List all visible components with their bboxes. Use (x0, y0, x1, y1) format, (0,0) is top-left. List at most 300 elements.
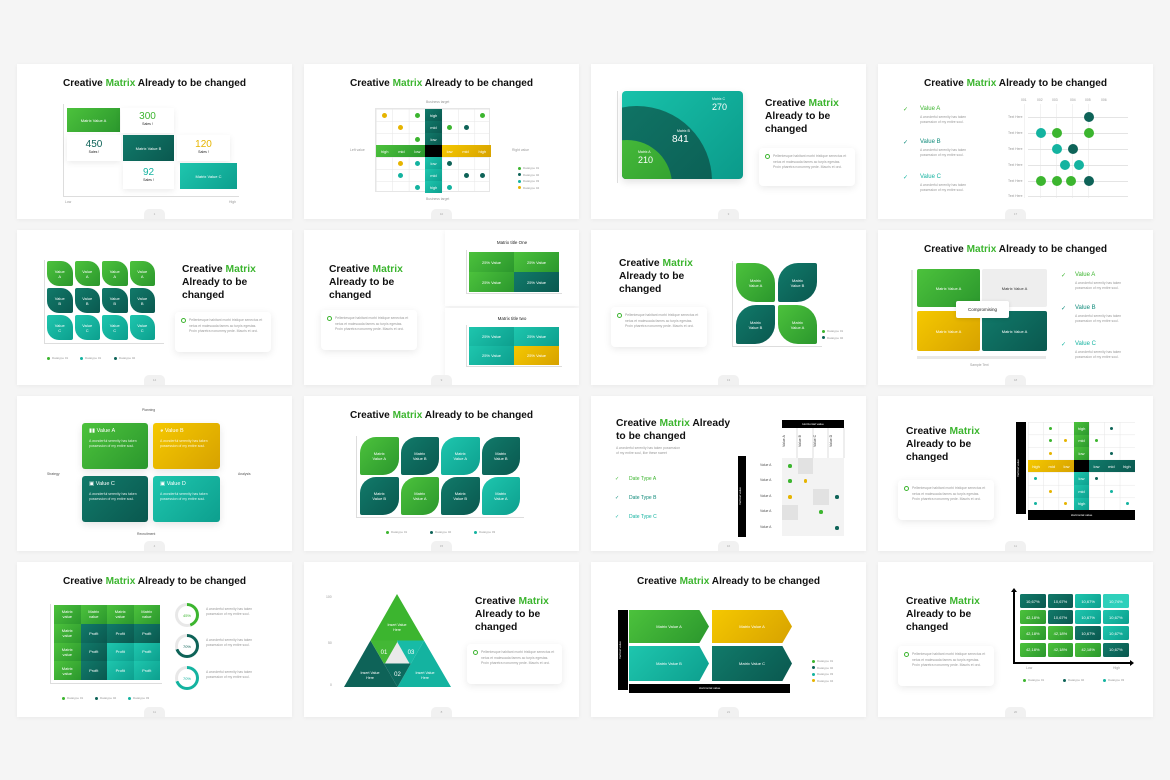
box: Matrix Value B: Matrix Value B (136, 146, 161, 150)
title: changed (906, 622, 948, 633)
legend (812, 659, 834, 682)
arrows: Matrix Value A (656, 624, 682, 629)
title (906, 426, 980, 463)
leaf grid (360, 437, 520, 515)
legend: Datatype 03 (1108, 678, 1124, 682)
checklist: ✓ (615, 495, 619, 501)
legend: Datatype 01 (52, 356, 68, 360)
card: 300 (121, 108, 174, 133)
slide 13: profit matrix + donuts (17, 562, 292, 717)
legend (62, 696, 149, 700)
quadrant: Matrix Value A (1002, 286, 1027, 290)
legend: Datatype 02 (119, 356, 135, 360)
page number: 9 (441, 378, 442, 382)
leaf grid: Value (137, 268, 147, 274)
leaf grid: Value (137, 296, 147, 300)
checklist: Date Type B (629, 495, 656, 501)
table: Value A (760, 478, 771, 482)
title: changed (619, 284, 661, 295)
arc panel: 841 (672, 134, 689, 145)
cross grid: low (1079, 476, 1085, 481)
leaf grid: B (113, 300, 116, 306)
card: Value C (82, 476, 148, 522)
title: Creative Matrix Already to be changed (637, 576, 820, 587)
slide 11: table matrix: of my entire soul, like these sweet (616, 451, 667, 455)
legend: Datatype 02 (523, 172, 539, 176)
card: Value A: ▮▮ Value A (89, 428, 115, 434)
leaf grid: C (141, 328, 144, 332)
slide 8: compromising quadrant (878, 230, 1153, 385)
dot chart: 006 (1101, 98, 1107, 102)
axes (63, 104, 239, 197)
page number (718, 375, 739, 385)
page number: 3 (728, 212, 729, 216)
arc panel (622, 91, 743, 179)
cross grid (1016, 422, 1135, 520)
panel: matrix one: 25% Value (482, 260, 501, 264)
quadrant (917, 269, 1047, 351)
percent grid: 10,67% (1081, 631, 1095, 636)
slide 11: table matrix: A wonderful serenity has taken possession (616, 446, 680, 450)
leaf grid: Matrix (495, 491, 506, 496)
leaf grid (47, 261, 155, 340)
slide 9: four value cards: Strategy (47, 472, 60, 476)
leaf grid: A (141, 274, 144, 278)
arc panel: Matrix B (677, 129, 690, 133)
card: 450: Sales ! (89, 150, 99, 154)
leaf grid: C (58, 328, 61, 332)
card: Value D: A wonderful serenity has taken possession of my entire soul. (160, 492, 208, 501)
horizontal bar (629, 684, 790, 693)
title: Already to be (619, 271, 684, 282)
arc panel: Matrix C (712, 97, 725, 101)
percent grid: 10,67% (1109, 647, 1123, 652)
page number (144, 375, 165, 385)
cross grid: low (447, 148, 453, 154)
checklist: ✓ (1061, 273, 1066, 279)
table: Value B (798, 435, 802, 447)
percent grid (1020, 594, 1129, 657)
triangle chart (344, 594, 451, 687)
page number: 11 (153, 710, 156, 714)
page number: 8 (441, 710, 442, 714)
matrix: Profit (116, 649, 125, 654)
cross grid: mid (1108, 464, 1115, 469)
legend: Datatype 01 (85, 356, 101, 360)
horizontal bar: Horizontal value (699, 686, 720, 690)
leaf grid: Value B (413, 456, 427, 461)
checklist: possession of my entire soul. (1075, 319, 1119, 323)
page number: 20 (1014, 710, 1017, 714)
panel: matrix one: 25% Value (527, 280, 546, 284)
leaf grid: Value (110, 268, 120, 274)
dot chart: 002 (1037, 98, 1043, 102)
slide 12: cross matrix with bars (878, 396, 1153, 551)
triangle chart: Insert Value (416, 671, 434, 675)
title (329, 264, 403, 301)
triangle chart: 01 (381, 650, 388, 656)
legend: Datatype 01 (817, 659, 833, 663)
panel: matrix two: 25% Value (482, 353, 501, 358)
panel: matrix two: 25% Value (482, 334, 501, 339)
page number: 14 (153, 378, 156, 382)
slide 13: profit matrix + donuts: A wonderful serenity has taken (206, 638, 252, 642)
text card: Pellentesque habitant morbi tristique senectus et netus et malesuada fames ac turpis egestas. Proin pharetra nonummy pede. Mauris et orci. (625, 313, 698, 328)
matrix: Matrix (62, 666, 73, 671)
cross grid: high (1032, 464, 1040, 469)
arrows (629, 610, 709, 643)
table: Value A (760, 509, 771, 513)
slide 15: arrow matrix (591, 562, 866, 717)
slide 11: table matrix (591, 396, 866, 551)
cross grid: high (1078, 426, 1085, 431)
slide 15: arrow matrix: Matrix Value C (739, 661, 765, 666)
leaf grid: C (113, 328, 116, 332)
dot chart: Text Here (1008, 163, 1023, 167)
clover: Matrix (750, 320, 761, 324)
legend: Datatype 03 (133, 696, 149, 700)
cross grid: mid (398, 148, 405, 154)
clover: Value B (791, 282, 804, 288)
slide 13: profit matrix + donuts: A wonderful serenity has taken (206, 607, 252, 611)
legend: Datatype 02 (100, 696, 116, 700)
matrix: Profit (89, 668, 98, 673)
text card: Pellentesque habitant morbi tristique senectus et netus et malesuada fames ac turpis egestas. Proin pharetra nonummy pede. Mauris et orci. (773, 154, 846, 169)
title: changed (906, 452, 948, 463)
slide 2: cross matrix (304, 64, 579, 219)
slide 14: triangle: 0 (330, 683, 332, 687)
checklist: Date Type C (629, 514, 657, 520)
matrix: Matrix (141, 609, 152, 614)
slide 2: cross matrix: Left value (350, 148, 365, 152)
slide 9: four value cards: Analysis (238, 472, 251, 476)
matrix: Matrix (115, 609, 126, 614)
arc panel: Matrix A (638, 150, 651, 154)
page number (431, 541, 452, 551)
page number (718, 707, 739, 717)
legend: Datatype 04 (523, 186, 539, 190)
slide 13: profit matrix + donuts: possession of my entire soul. (206, 643, 250, 647)
leaf grid: Value (55, 322, 65, 328)
leaf grid: Value B (453, 496, 467, 501)
checklist: A wonderful serenity has taken (1075, 350, 1121, 354)
quadrant: Matrix Value A (1002, 328, 1027, 334)
legend: Datatype 02 (827, 336, 843, 340)
panel: matrix two (445, 308, 579, 385)
percent grid: 42,18% (1054, 631, 1067, 636)
donut: 70% teal (175, 666, 199, 690)
arc panel: 210 (638, 155, 653, 165)
axes with arrows (1013, 590, 1015, 664)
slide 8: compromising quadrant: Sample Text (970, 363, 989, 367)
checklist: Value A (920, 106, 940, 112)
cross grid: Horizontal value (1071, 513, 1092, 517)
checklist: ✓ (903, 107, 908, 113)
clover: Value A (791, 324, 804, 330)
checklist: possession of my entire soul. (1075, 286, 1119, 290)
matrix: value (62, 614, 72, 619)
leaf grid: A (113, 274, 116, 278)
checklist: A wonderful serenity has taken (1075, 314, 1121, 318)
title: Creative Matrix (765, 98, 839, 109)
percent grid: 42,18% (1081, 647, 1095, 652)
page number (144, 209, 165, 219)
slide 9: four value cards: Planning (142, 408, 155, 412)
table (738, 420, 844, 537)
leaf grid: Value (82, 296, 92, 300)
dot chart: 003 (1052, 98, 1058, 102)
clover: Matrix (792, 320, 803, 324)
leaf grid: B (86, 300, 89, 306)
clover: Matrix (750, 278, 761, 282)
leaf grid: Value A (413, 496, 426, 501)
matrix: value (89, 614, 99, 619)
triangle chart: Insert Value (361, 671, 379, 675)
text card: Pellentesque habitant morbi tristique senectus et netus et malesuada fames ac turpis egestas. Proin pharetra nonummy pede. Mauris et orci. (912, 486, 985, 501)
dot chart: Text Here (1008, 179, 1023, 183)
page number (1005, 707, 1026, 717)
text card: Pellentesque habitant morbi tristique senectus et netus et malesuada fames ac turpis egestas. Proin pharetra nonummy pede. Mauris et orci. (189, 318, 262, 333)
dot chart: Text Here (1008, 131, 1023, 135)
card: 450: 450 (86, 139, 102, 150)
checklist: ✓ (1061, 342, 1066, 348)
title: Creative Matrix Already (616, 418, 730, 429)
cross grid: low (1064, 464, 1070, 469)
slide 9: four value cards: Recruitment (137, 532, 155, 536)
dot chart: 005 (1085, 98, 1091, 102)
slide 6: two matrices (304, 230, 579, 385)
legend: Datatype 02 (817, 666, 833, 670)
text card (611, 307, 707, 347)
card: Value C: A wonderful serenity has taken possession of my entire soul. (89, 492, 137, 501)
checklist: Value C (920, 174, 941, 180)
text card (321, 310, 417, 350)
leaf grid: Value (82, 322, 92, 328)
slide 16: percent matrix: High (1113, 666, 1120, 670)
card: 92: 92 (143, 167, 154, 178)
text card: Pellentesque habitant morbi tristique senectus et netus et malesuada fames ac turpis egestas. Proin pharetra nonummy pede. Mauris et orci. (912, 652, 985, 667)
cross grid: high (479, 148, 486, 154)
slide 14: triangle: 100 (326, 595, 332, 599)
title: Creative Matrix Already to be changed (63, 78, 246, 89)
card: Value B (153, 423, 220, 469)
cross grid: mid (1048, 464, 1055, 469)
card: Value D: ▣ Value D (160, 481, 186, 487)
slide 4: dot grid (878, 64, 1153, 219)
page number: 10 (440, 212, 443, 216)
title (765, 98, 839, 135)
leaf grid: Value (137, 322, 147, 328)
cross grid: high (1123, 464, 1131, 469)
matrix: Profit (116, 668, 125, 673)
slide 2: cross matrix: Right value (512, 148, 529, 152)
percent grid: 42,18% (1054, 647, 1067, 652)
leaf grid: Matrix (414, 491, 425, 496)
dot chart (1008, 98, 1128, 198)
matrix: Profit (116, 631, 125, 636)
title: changed (182, 290, 224, 301)
cross grid (375, 108, 490, 192)
checklist: ✓ (615, 514, 619, 520)
page number: 1 (154, 212, 155, 216)
cross grid: mid (462, 148, 469, 154)
leaf grid: Matrix (374, 491, 385, 496)
checklist (903, 106, 966, 192)
title: Creative Matrix Already to be changed (924, 244, 1107, 255)
leaf grid: Value A (494, 496, 508, 501)
text card (467, 644, 562, 684)
page number: 15 (440, 544, 443, 548)
table: Value A (760, 494, 771, 498)
vertical bar: Vertical value (618, 641, 622, 659)
card: Value C: ▣ Value C (89, 481, 115, 487)
percent grid: 10,67% (1081, 598, 1095, 604)
checklist: A wonderful serenity has taken (920, 115, 966, 119)
slide 13: profit matrix + donuts: A wonderful serenity has taken (206, 670, 252, 674)
matrix: Matrix (62, 628, 73, 633)
percent grid: 42,18% (1026, 615, 1040, 620)
title: Creative Matrix Already to be changed (63, 576, 246, 587)
leaf grid: B (141, 300, 144, 306)
title: Creative Matrix Already to be changed (350, 410, 533, 421)
clover: Value A (749, 282, 762, 288)
page number (1005, 541, 1026, 551)
box: Matrix Value A: Matrix Value A (81, 118, 106, 122)
page number (431, 375, 452, 385)
leaf grid: A (86, 274, 89, 278)
matrix: Profit (89, 649, 98, 654)
page number (431, 209, 452, 219)
page number: 21 (727, 710, 730, 714)
triangle chart: 02 (394, 672, 401, 678)
leaf grid: Value A (454, 456, 467, 461)
title: Already to be (906, 609, 971, 620)
card: Value B: ◕ Value B (160, 428, 184, 434)
leaf grid: Matrix (374, 451, 385, 456)
legend: Datatype 02 (1068, 678, 1084, 682)
title: Creative Matrix (906, 426, 980, 437)
text card (175, 312, 271, 352)
box: Matrix Value C (180, 163, 237, 189)
quadrant: Matrix Value A (936, 328, 961, 334)
leaf grid: Matrix (455, 491, 466, 496)
title (475, 596, 549, 633)
legend: Datatype 03 (523, 179, 539, 183)
checklist: Value B (920, 139, 941, 145)
triangle chart: Here (366, 676, 374, 680)
leaf grid: Value B (494, 456, 508, 461)
cross grid: low (430, 160, 436, 166)
title: to be changed (616, 431, 686, 442)
checklist: possession of my entire soul. (920, 188, 964, 192)
panel: matrix one: 25% Value (527, 260, 546, 264)
leaf grid: C (86, 328, 89, 332)
page number: 4 (154, 544, 155, 548)
text card: Pellentesque habitant morbi tristique senectus et netus et malesuada fames ac turpis egestas. Proin pharetra nonummy pede. Mauris et orci. (335, 316, 408, 331)
legend: Datatype 01 (391, 530, 407, 534)
box: Matrix Value C: Matrix Value C (196, 174, 221, 178)
title: Creative Matrix (475, 596, 549, 607)
card: Value D (153, 476, 220, 522)
leaf grid: B (58, 300, 61, 306)
leaf grid: A (58, 274, 61, 278)
dot chart: Text Here (1008, 147, 1023, 151)
matrix: value (62, 671, 72, 676)
percent grid: 10,67% (1054, 598, 1067, 604)
page number (431, 707, 452, 717)
percent grid: 42,18% (1026, 647, 1040, 652)
card: 450 (67, 135, 121, 161)
title: changed (475, 622, 517, 633)
page number (718, 209, 739, 219)
matrix: value (115, 614, 125, 619)
cross grid: low (430, 136, 436, 142)
matrix: Profit (142, 631, 151, 636)
title: Already to be (765, 111, 830, 122)
title: Creative Matrix (906, 596, 980, 607)
percent grid: 10,67% (1081, 615, 1095, 620)
triangle chart: Insert Value (388, 623, 406, 627)
quadrant: Compromising (968, 307, 997, 312)
checklist: Value A (1075, 272, 1095, 278)
cross grid: mid (1078, 489, 1085, 494)
checklist: possession of my entire soul. (920, 153, 964, 157)
matrix: Profit (142, 649, 151, 654)
page number (144, 707, 165, 717)
title (906, 596, 980, 633)
panel: matrix two: 25% Value (527, 334, 546, 339)
clover: Matrix (792, 278, 803, 282)
slide 7: clover matrix (591, 230, 866, 385)
percent grid: 10,67% (1026, 598, 1040, 604)
page number: 16 (727, 544, 730, 548)
card: 120: 120 (195, 139, 212, 150)
title: Already to be (329, 277, 394, 288)
box: Matrix Value A (67, 108, 120, 132)
vertical bar (618, 610, 628, 690)
card: 300: Sales ! (142, 122, 153, 126)
checklist: Date Type A (629, 476, 656, 482)
panel: matrix one: 25% Value (482, 280, 501, 284)
checklist: ✓ (903, 140, 908, 146)
slide 9: four value cards (17, 396, 292, 551)
quadrant: Matrix Value A (936, 286, 961, 290)
slide 1: sales matrix: Low (65, 200, 71, 204)
percent grid: 10,67% (1109, 615, 1123, 620)
donut: 45%: 45% (183, 612, 191, 618)
table: Value A (782, 435, 786, 447)
slide 5: leaf grid 4x3 (17, 230, 292, 385)
title: Already to be (906, 439, 971, 450)
checklist: possession of my entire soul. (920, 120, 964, 124)
card: Value B: A wonderful serenity has taken possession of my entire soul. (160, 439, 208, 448)
donut: 70% dark: 70% (183, 644, 191, 648)
leaf grid: Value (55, 296, 65, 300)
title: changed (765, 124, 807, 135)
cross grid: low (1079, 451, 1085, 456)
clover (736, 263, 817, 344)
card: 92 (123, 163, 174, 189)
text card (898, 646, 994, 686)
leaf grid: Value (110, 296, 120, 300)
page number: 18 (1014, 378, 1017, 382)
checklist: ✓ (903, 175, 908, 181)
legend (1023, 678, 1124, 682)
cross grid: high (381, 148, 388, 154)
leaf grid: Matrix (455, 451, 466, 456)
slide 1: sales matrix: High (229, 200, 236, 204)
leaf grid: Value (55, 268, 65, 274)
